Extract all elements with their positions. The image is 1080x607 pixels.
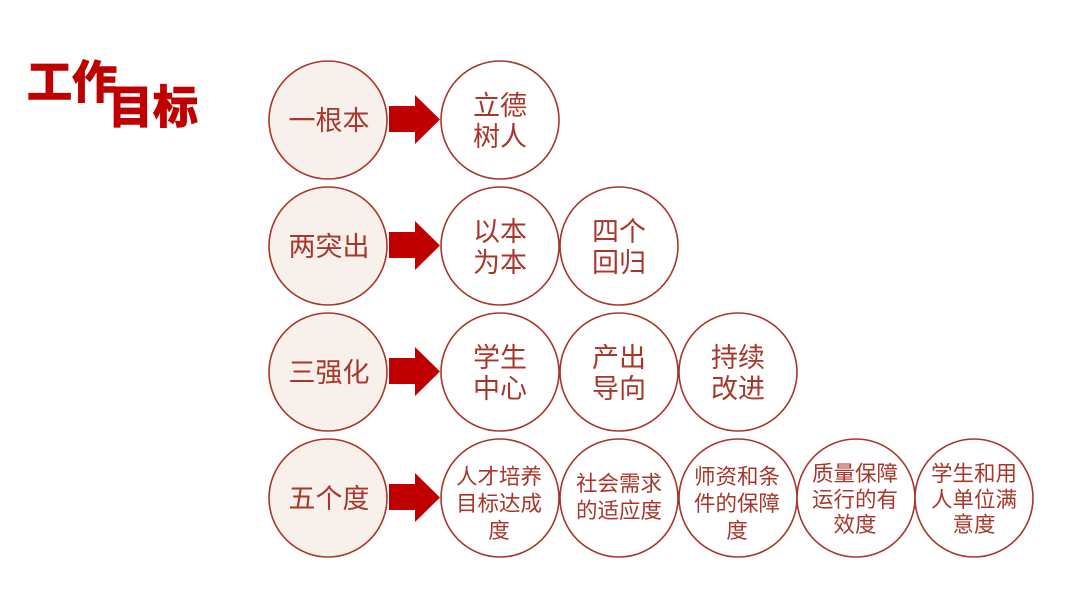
circle: 学生和用人单位满意度: 学生和用 bbox=[931, 462, 1017, 486]
circle: 师资和条件的保障度: 师资和条 bbox=[694, 465, 780, 489]
circle: 人才培养目标达成度 bbox=[441, 439, 559, 557]
circle: 人才培养目标达成度: 人才培养 bbox=[456, 465, 542, 489]
circle: 立德树人: 立德 bbox=[473, 91, 527, 121]
circle: 两突出: 两突出 bbox=[288, 232, 370, 262]
circle: 两突出 bbox=[269, 187, 387, 305]
circle: 持续改进: 持续 bbox=[711, 343, 765, 373]
circle: 一根本: 一根本 bbox=[288, 106, 370, 136]
circle: 社会需求的适应度 bbox=[560, 439, 678, 557]
circle: 三强化 bbox=[269, 313, 387, 431]
circle: 以本为本: 为本 bbox=[473, 248, 527, 278]
circle: 五个度 bbox=[269, 439, 387, 557]
circle: 质量保障运行的有效度: 质量保障 bbox=[812, 462, 898, 486]
circle: 学生和用人单位满意度: 人单位满 bbox=[931, 488, 1017, 512]
circle: 师资和条件的保障度: 件的保障 bbox=[694, 492, 780, 516]
arrow: row 3 bbox=[389, 347, 440, 396]
circle: 社会需求的适应度: 的适应度 bbox=[576, 499, 662, 523]
circle: 学生中心: 学生 bbox=[473, 343, 527, 373]
title: 工作 bbox=[27, 57, 117, 108]
circle: 学生和用人单位满意度: 意度 bbox=[952, 513, 996, 537]
circle: 人才培养目标达成度: 度 bbox=[488, 519, 510, 543]
arrow: row 2 bbox=[389, 221, 440, 270]
circle: 质量保障运行的有效度: 效度 bbox=[833, 513, 877, 537]
row: 一根本 bbox=[269, 61, 559, 179]
circle: 立德树人 bbox=[441, 61, 559, 179]
circle: 三强化: 三强化 bbox=[288, 358, 370, 388]
circle: 持续改进: 改进 bbox=[711, 374, 765, 404]
circle: 四个回归 bbox=[560, 187, 678, 305]
circle: 以本为本 bbox=[441, 187, 559, 305]
title bbox=[27, 57, 198, 133]
circle: 质量保障运行的有效度: 运行的有 bbox=[812, 488, 898, 512]
circle: 人才培养目标达成度: 目标达成 bbox=[456, 492, 542, 516]
circle: 学生中心: 中心 bbox=[473, 374, 527, 404]
circle: 师资和条件的保障度 bbox=[679, 439, 797, 557]
circle: 质量保障运行的有效度 bbox=[797, 439, 915, 557]
circle: 四个回归: 四个 bbox=[592, 217, 646, 247]
circle: 产出导向 bbox=[560, 313, 678, 431]
circle: 学生中心 bbox=[441, 313, 559, 431]
circle: 一根本 bbox=[269, 61, 387, 179]
arrow: row 1 bbox=[389, 95, 440, 144]
circle: 产出导向: 导向 bbox=[592, 374, 646, 404]
circle: 产出导向: 产出 bbox=[592, 343, 646, 373]
circle: 四个回归: 回归 bbox=[592, 248, 646, 278]
circle: 社会需求的适应度: 社会需求 bbox=[576, 472, 662, 496]
row: 五个度 bbox=[269, 439, 1033, 557]
circle: 五个度: 五个度 bbox=[288, 484, 370, 514]
circle: 以本为本: 以本 bbox=[473, 217, 527, 247]
arrow: row 4 bbox=[389, 473, 440, 522]
circle: 师资和条件的保障度: 度 bbox=[726, 519, 748, 543]
circle: 学生和用人单位满意度 bbox=[915, 439, 1033, 557]
row: 两突出 bbox=[269, 187, 678, 305]
title: 目标 bbox=[108, 82, 198, 133]
row: 三强化 bbox=[269, 313, 797, 431]
circle: 立德树人: 树人 bbox=[473, 122, 527, 152]
circle: 持续改进 bbox=[679, 313, 797, 431]
